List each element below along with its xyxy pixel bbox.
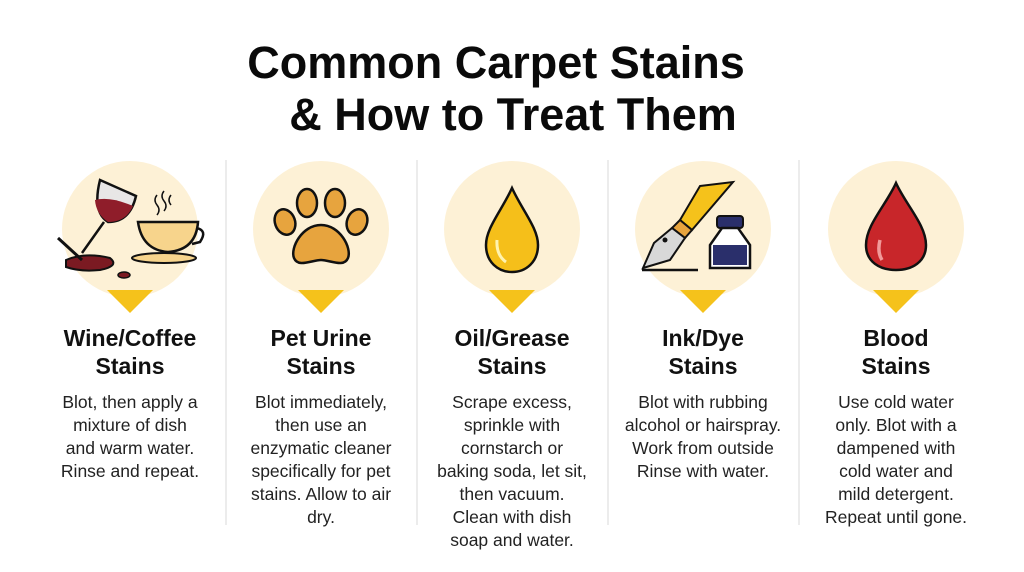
text block (437, 392, 587, 550)
text block (250, 392, 392, 527)
text block: Blot with rubbing (638, 392, 768, 412)
text block: baking soda, let sit, (437, 461, 587, 481)
text block: enzymatic cleaner (250, 438, 392, 458)
text block (825, 392, 967, 527)
icon: paw (253, 161, 389, 313)
text block: Use cold water (838, 392, 954, 412)
text block: only. Blot with a (835, 415, 957, 435)
text block: and warm water. (66, 438, 194, 458)
heading: Pet Urine (271, 325, 371, 351)
text block: cold water and (839, 461, 953, 481)
panel: blood (825, 161, 967, 527)
heading (861, 325, 931, 379)
text block: soap and water. (450, 530, 574, 550)
text block (61, 392, 199, 481)
icon: blood drop (828, 161, 964, 313)
icon: oil drop (444, 161, 580, 313)
heading: Ink/Dye (662, 325, 744, 351)
heading (662, 325, 744, 379)
heading: Stains (668, 353, 738, 379)
text block: alcohol or hairspray. (625, 415, 781, 435)
panel: wine/coffee (58, 161, 203, 481)
icon: wine and coffee (58, 161, 203, 313)
text block: Rinse with water. (637, 461, 769, 481)
text block: stains. Allow to air (251, 484, 391, 504)
text block: cornstarch or (461, 438, 563, 458)
panel: oil/grease (437, 161, 587, 550)
text block: Rinse and repeat. (61, 461, 199, 481)
text block: then vacuum. (459, 484, 565, 504)
title: & How to Treat Them (289, 89, 737, 140)
text block: Clean with dish (453, 507, 571, 527)
text block: mild detergent. (838, 484, 954, 504)
heading (454, 325, 570, 379)
heading (271, 325, 371, 379)
panel: pet urine (250, 161, 392, 527)
text block: Scrape excess, (452, 392, 572, 412)
text block: mixture of dish (73, 415, 187, 435)
text block: Blot, then apply a (62, 392, 198, 412)
text block: Work from outside (632, 438, 774, 458)
heading: Blood (863, 325, 929, 351)
title (247, 37, 745, 140)
heading: Stains (477, 353, 547, 379)
heading: Stains (95, 353, 165, 379)
heading (64, 325, 196, 379)
text block: sprinkle with (464, 415, 560, 435)
text block: specifically for pet (251, 461, 391, 481)
title: Common Carpet Stains (247, 37, 745, 88)
text block (625, 392, 781, 481)
heading: Stains (861, 353, 931, 379)
heading: Stains (286, 353, 356, 379)
text block: Repeat until gone. (825, 507, 967, 527)
heading: Oil/Grease (454, 325, 570, 351)
text block: dampened with (837, 438, 955, 458)
text block: Blot immediately, (255, 392, 387, 412)
heading: Wine/Coffee (64, 325, 196, 351)
icon: pen and ink (635, 161, 771, 313)
panel: ink/dye (625, 161, 781, 481)
text block: dry. (307, 507, 335, 527)
text block: then use an (275, 415, 367, 435)
